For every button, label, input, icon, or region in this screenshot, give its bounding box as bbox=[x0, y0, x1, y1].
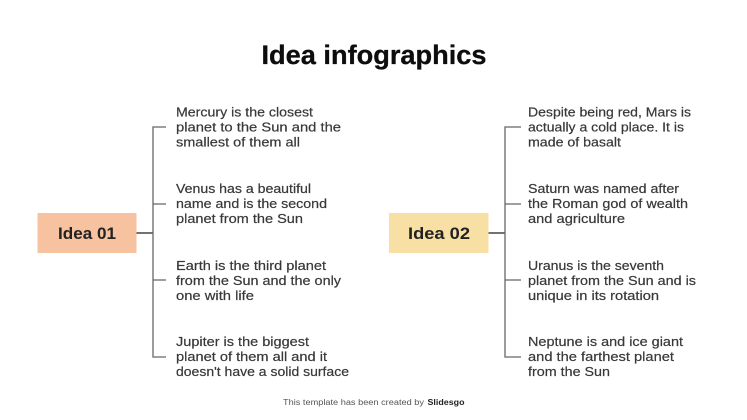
text block: Saturn bbox=[528, 182, 688, 226]
text block: Earth bbox=[176, 259, 342, 303]
text block: Earth: one with life bbox=[176, 289, 254, 303]
footer credit: This template has been created by bbox=[283, 398, 424, 407]
connector: idea 02 bracket bbox=[488, 127, 521, 357]
panel: idea 02 bbox=[389, 106, 696, 379]
text block: Uranus: planet from the Sun and is bbox=[528, 274, 696, 288]
text block: Mercury bbox=[176, 106, 341, 150]
panel: idea 01 bbox=[38, 106, 349, 379]
box: idea 02 bbox=[389, 213, 488, 253]
text block: Saturn: the Roman god of wealth bbox=[528, 197, 688, 211]
text block: Jupiter bbox=[176, 335, 349, 379]
text block: Saturn: Saturn was named after bbox=[528, 182, 679, 196]
text block: Mercury: planet to the Sun and the bbox=[176, 121, 341, 135]
footer credit: Slidesgo bbox=[428, 397, 464, 407]
text block: Neptune: from the Sun bbox=[528, 365, 610, 379]
text block: Jupiter: Jupiter is the biggest bbox=[176, 335, 310, 349]
text block: Venus bbox=[176, 182, 327, 226]
text block: Mars: Despite being red, Mars is bbox=[528, 106, 691, 120]
text block: Neptune: and the farthest planet bbox=[528, 350, 675, 364]
box: idea 01: Idea 01 bbox=[58, 224, 116, 243]
text block: Uranus: Uranus is the seventh bbox=[528, 259, 664, 273]
text block: Mercury: Mercury is the closest bbox=[176, 106, 314, 120]
text block: Mars: actually a cold place. It is bbox=[528, 121, 684, 135]
text block: Venus: name and is the second bbox=[176, 197, 327, 211]
footer credit bbox=[283, 397, 464, 407]
title: Idea infographics bbox=[262, 40, 486, 70]
text block: Neptune bbox=[528, 335, 684, 379]
text block: Venus: planet from the Sun bbox=[176, 212, 303, 226]
text block: Earth: Earth is the third planet bbox=[176, 259, 327, 273]
text block: Mars: made of basalt bbox=[528, 136, 622, 150]
text block: Neptune: Neptune is and ice giant bbox=[528, 335, 684, 349]
text block: Saturn: and agriculture bbox=[528, 212, 625, 226]
text block: Jupiter: planet of them all and it bbox=[176, 350, 328, 364]
text block: Earth: from the Sun and the only bbox=[176, 274, 342, 288]
text block: Venus: Venus has a beautiful bbox=[176, 182, 311, 196]
text block: Jupiter: doesn't have a solid surface bbox=[176, 365, 349, 379]
text block: Mercury: smallest of them all bbox=[176, 136, 300, 150]
text block: Uranus bbox=[528, 259, 696, 303]
connector: idea 01 bracket bbox=[136, 127, 166, 357]
text block: Uranus: unique in its rotation bbox=[528, 289, 659, 303]
box: idea 02: Idea 02 bbox=[408, 224, 470, 243]
box: idea 01 bbox=[38, 213, 136, 253]
text block: Mars bbox=[528, 106, 691, 150]
